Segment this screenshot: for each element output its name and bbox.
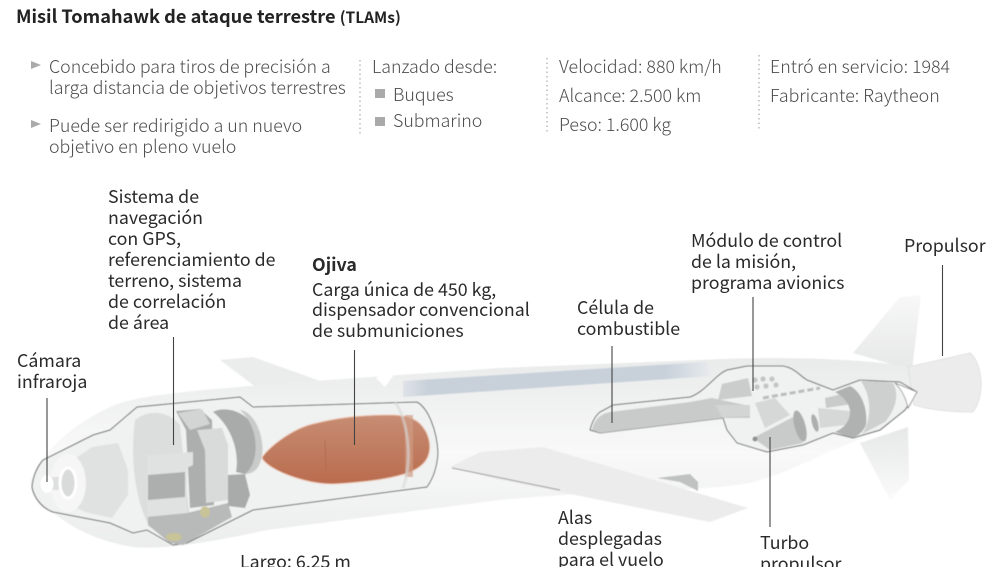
text block: service — [770, 53, 950, 108]
text block: description — [31, 53, 346, 159]
label: navigation system: de correlación — [108, 288, 226, 314]
label: turbo: Turbo — [760, 529, 809, 555]
upper rear fin — [853, 295, 921, 370]
label: navigation system: referenciamiento de — [108, 246, 276, 272]
label: mission module: programa avionics — [691, 269, 844, 295]
label: warhead: de submuniciones — [312, 317, 464, 343]
label: fuel cell: Célula de — [577, 294, 654, 320]
label: wings: desplegadas — [558, 525, 662, 551]
text block: specs: Alcance: 2.500 km — [559, 82, 701, 108]
deployed wing — [450, 447, 748, 522]
label: navigation system: terreno, sistema — [108, 267, 242, 293]
text block: description: Concebido para tiros de precisión a — [49, 53, 331, 79]
blue stripe — [403, 362, 712, 397]
text block: launch platforms: Buques — [393, 81, 454, 107]
label: navigation system: Sistema de — [108, 183, 199, 209]
label: camera: infraroja — [17, 368, 87, 394]
text block: description: Puede ser redirigido a un nuevo — [49, 112, 302, 138]
propulsor nozzle — [908, 353, 981, 412]
text block: specs — [559, 53, 722, 137]
front cutaway section — [32, 397, 438, 545]
text block: launch platforms: Submarino — [393, 107, 482, 133]
label: navigation system: con GPS, — [108, 225, 181, 251]
missile body — [30, 358, 920, 548]
icon: bullet arrow — [31, 61, 41, 69]
camera housing — [62, 443, 128, 518]
label: warhead: Carga única de 450 kg, — [312, 276, 496, 302]
leader lines — [47, 265, 942, 527]
missile illustration — [30, 295, 981, 548]
front upper fin — [220, 357, 323, 388]
label: fuel cell: combustible — [577, 315, 680, 341]
text block: launch platforms — [372, 53, 497, 133]
text block: launch platforms: Lanzado desde: — [372, 53, 497, 79]
rear cutaway section — [590, 366, 917, 452]
navigation system — [147, 409, 263, 545]
lower rear fin — [860, 427, 909, 500]
text block: specs: Peso: 1.600 kg — [559, 111, 671, 137]
label: mission module: Módulo de control — [691, 227, 842, 253]
label: warhead: dispensador convencional — [312, 296, 530, 322]
icon: infrared camera lens — [40, 454, 86, 512]
text block: description: objetivo en pleno vuelo — [49, 133, 236, 159]
mission control module — [752, 376, 779, 390]
title: Misil Tomahawk de ataque terrestre (TLAMs) — [16, 3, 401, 29]
warhead — [262, 415, 430, 484]
label: navigation system: navegación — [108, 204, 203, 230]
icon: bullet arrow 2 — [31, 120, 41, 128]
icon: stripe notch — [376, 372, 393, 387]
text block: service: Entró en servicio: 1984 — [770, 53, 950, 79]
label: wings: Alas — [558, 504, 592, 530]
section ring — [395, 402, 408, 488]
text block: description: larga distancia de objetivos terrestres — [49, 74, 346, 100]
label: warhead: Ojiva — [312, 251, 357, 277]
label: navigation system: de área — [108, 309, 169, 335]
label: camera: Cámara — [17, 347, 81, 373]
text block: specs: Velocidad: 880 km/h — [559, 53, 722, 79]
label: propulsor: Propulsor — [904, 232, 986, 258]
text block: service: Fabricante: Raytheon — [770, 82, 940, 108]
fuel cell — [592, 398, 750, 433]
turbofan engine — [752, 380, 917, 450]
label: mission module: de la misión, — [691, 248, 796, 274]
